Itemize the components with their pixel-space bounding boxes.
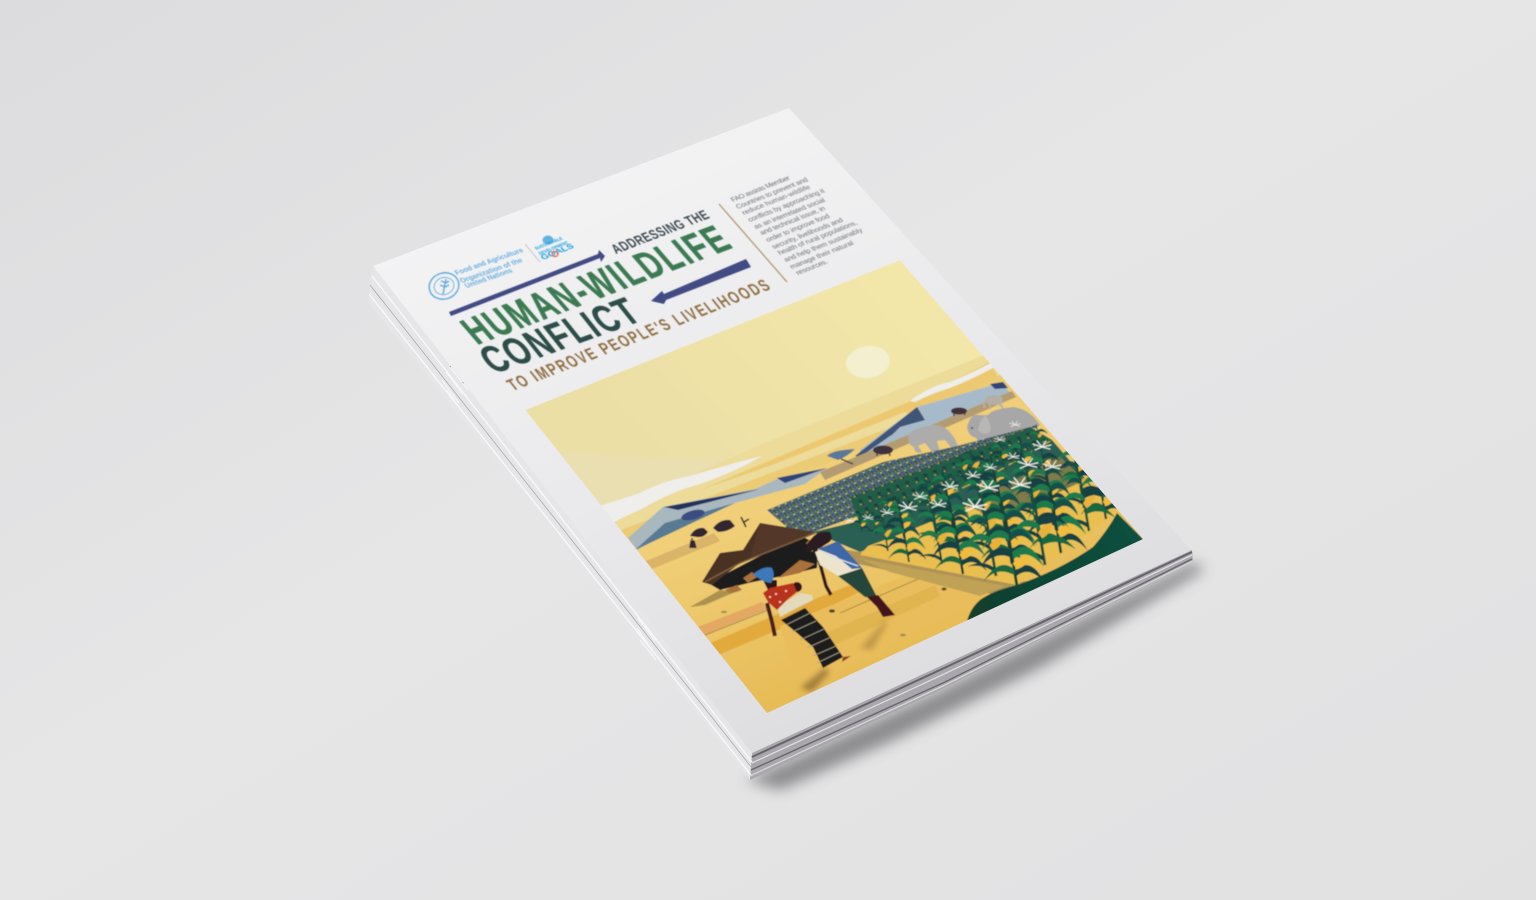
pale lower sky <box>556 448 724 505</box>
title line 1: HUMAN-WILDLIFE <box>452 218 740 352</box>
main ground <box>686 458 1143 713</box>
intro paragraph: conflicts by approaching it <box>745 187 827 224</box>
SDG logo: GOALS <box>539 242 576 262</box>
woman carrying a baby <box>753 567 851 692</box>
sky <box>525 260 984 460</box>
intro paragraph: Countries to prevent and <box>733 176 810 211</box>
corn stalks <box>851 413 1128 586</box>
cover page <box>373 108 1191 753</box>
intro paragraph: and help them sustainably <box>781 226 865 264</box>
baby head <box>792 582 802 592</box>
hut <box>690 523 822 607</box>
FAO name <box>452 246 525 290</box>
logo divider <box>525 244 540 262</box>
middle teal band <box>813 440 1095 552</box>
yellow crop base <box>860 457 1117 585</box>
white tassels <box>845 421 1061 523</box>
intro paragraph: manage their natural <box>787 239 856 271</box>
intro paragraph: order to improve food <box>763 212 832 244</box>
skirt <box>781 608 843 668</box>
booklet drop shadow <box>746 562 1204 790</box>
subtitle: TO IMPROVE PEOPLE'S LIVELIHOODS <box>503 277 774 395</box>
intro paragraph: FAO assists Member <box>728 174 793 204</box>
corn field <box>767 413 1128 596</box>
white clouds <box>600 358 1000 526</box>
SDG logo <box>534 236 576 262</box>
header: logos, title, intro text <box>426 174 865 395</box>
stacked pages of the booklet <box>368 266 1193 780</box>
intro paragraph: and technical issue, in <box>757 204 827 237</box>
right mountain with brown ridge <box>820 382 1016 480</box>
lower arrow <box>651 259 751 304</box>
FAO name: Organization of the <box>457 256 525 285</box>
dark green hill <box>966 512 1143 620</box>
FAO logo <box>426 269 462 303</box>
FAO name: Food and Agriculture <box>452 246 525 277</box>
intro paragraph: as an interrelated social <box>751 196 827 231</box>
staples on the spine <box>442 366 661 660</box>
divider rule <box>719 204 787 282</box>
upper arrow <box>449 250 605 316</box>
head wrap <box>753 567 774 583</box>
far elephant <box>983 395 1003 409</box>
ground bands <box>646 533 720 569</box>
SDG logo: SUSTAINABLE <box>534 236 564 251</box>
arm <box>767 603 775 636</box>
intro paragraph <box>728 174 865 277</box>
cover illustration <box>525 260 1143 713</box>
elephant middle <box>908 425 958 453</box>
yellow line across the field <box>927 440 1052 505</box>
intro paragraph: reduce human-wildlife <box>739 183 812 217</box>
face <box>763 580 777 590</box>
SDG logo: DEVELOPMENT <box>538 240 570 256</box>
red blouse <box>763 583 797 610</box>
eyebrow: ADDRESSING THE: ADDRESSING THE <box>607 207 713 257</box>
stones <box>721 588 946 636</box>
intro paragraph: resources. <box>793 258 830 277</box>
field shadow strip <box>820 546 1028 594</box>
far rows <box>767 427 1052 532</box>
intro paragraph: health of rural populations, <box>775 219 859 257</box>
man bending over <box>806 532 895 650</box>
back huts and figures <box>690 517 749 548</box>
left mountains <box>628 468 827 550</box>
distant sand bands <box>614 356 1000 530</box>
acacia tree <box>827 449 855 464</box>
distant buffalo <box>873 408 967 456</box>
baby sling <box>777 593 813 617</box>
elephant large <box>966 406 1040 442</box>
intro paragraph: security, livelihoods and <box>769 216 845 251</box>
title line 2: CONFLICT <box>470 290 649 381</box>
FAO name: United Nations <box>462 267 515 290</box>
sun <box>846 346 890 378</box>
